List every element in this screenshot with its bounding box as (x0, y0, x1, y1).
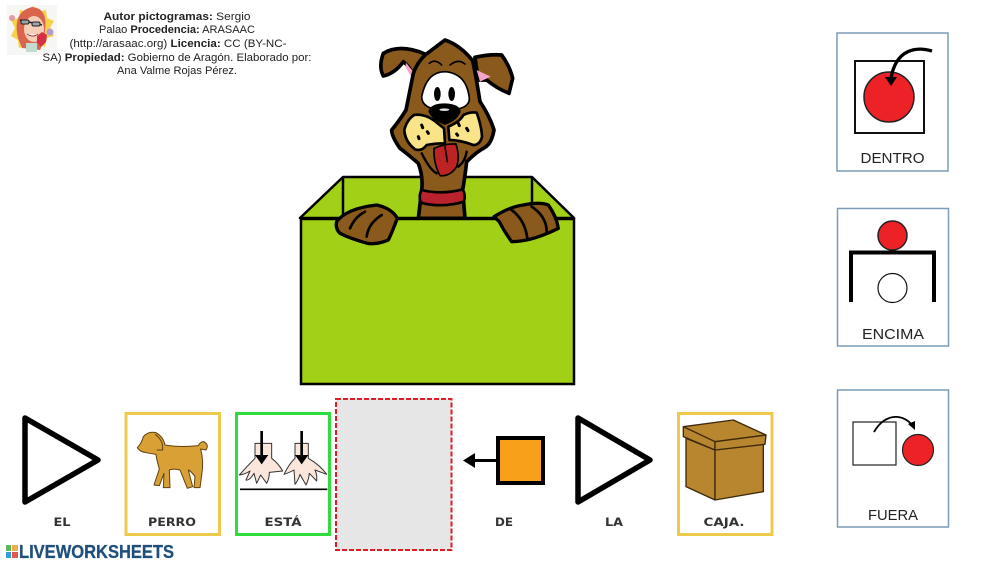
illustration: dog in green box (300, 40, 574, 384)
option card: DENTRO (837, 33, 948, 171)
text: credits (42, 11, 312, 77)
box front (301, 219, 574, 384)
pictogram: DE (463, 438, 543, 529)
option card: FUERA: FUERA (868, 507, 918, 524)
dog (381, 40, 513, 218)
text: credits: SA) Propiedad: Gobierno de Aragón. Elaborado por: (42, 52, 312, 64)
text: credits: Palao Procedencia: ARASAAC (99, 24, 255, 36)
pictogram card: PERRO (126, 414, 220, 534)
pictogram card: ESTÁ: ESTÁ (264, 514, 302, 529)
pictogram: DE: DE (495, 515, 513, 529)
pictogram card: CAJA: CAJA. (704, 515, 744, 529)
pictogram card: CAJA (678, 414, 772, 534)
pictogram: LA (578, 418, 650, 529)
logo: Liveworksheets: LIVEWORKSHEETS (19, 542, 174, 562)
pictogram card: ESTÁ (236, 414, 330, 534)
option card: FUERA (838, 390, 948, 527)
icon: hands with arrows (239, 431, 327, 489)
pictogram card: PERRO: PERRO (148, 515, 196, 529)
answer drop zone (336, 399, 452, 550)
option card: ENCIMA (838, 208, 948, 346)
text: credits: Ana Valme Rojas Pérez. (117, 65, 237, 77)
text: credits: Autor pictogramas: Sergio (103, 11, 251, 23)
pictogram: EL: EL (54, 515, 71, 529)
box back (300, 177, 574, 218)
icon: dog (137, 432, 207, 488)
option card: DENTRO: DENTRO (860, 150, 924, 167)
paws (336, 203, 558, 244)
pictogram: EL (25, 418, 98, 529)
option card: ENCIMA: ENCIMA (862, 326, 924, 343)
icon: author avatar (7, 5, 57, 55)
pictogram: LA: LA (605, 515, 623, 529)
icon: cardboard box (683, 420, 766, 500)
text: credits: (http://arasaac.org) Licencia: CC (BY-NC- (70, 38, 287, 50)
